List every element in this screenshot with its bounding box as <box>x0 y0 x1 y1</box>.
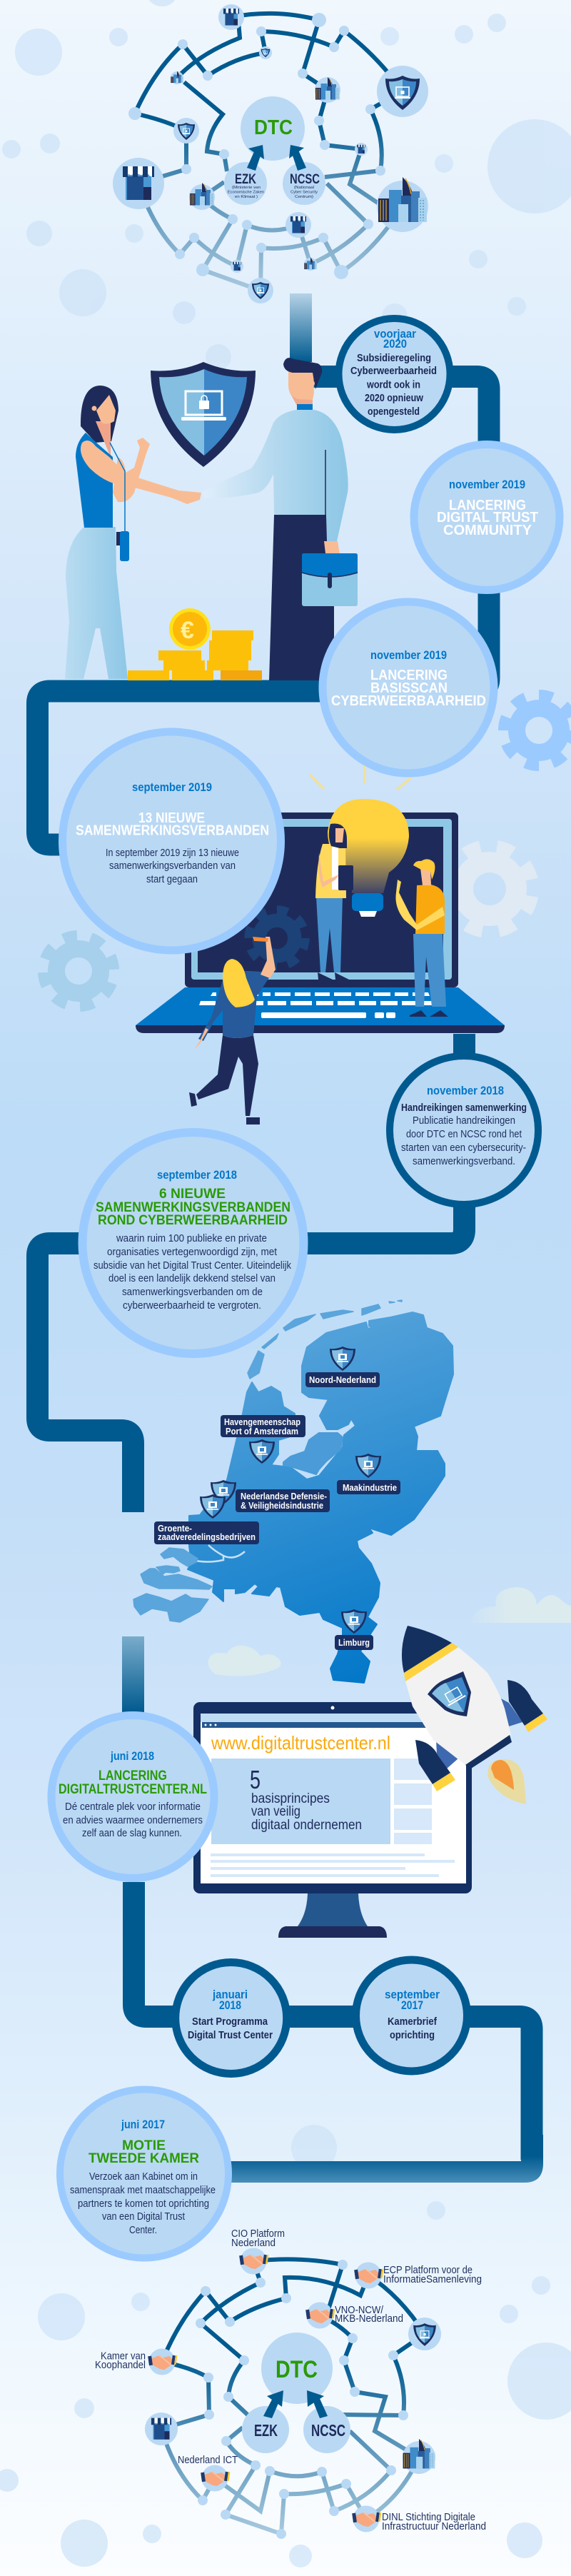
body: organisaties vertegenwoordigd zijn, met <box>107 1246 278 1258</box>
illustration: coins <box>128 608 262 680</box>
label: Kamer van Koophandel: Kamer van <box>101 2350 146 2362</box>
label: Defensie: & Veiligheidsindustrie <box>241 1500 323 1511</box>
rocket <box>402 1626 547 1804</box>
body: oprichting <box>390 2030 435 2041</box>
label: Kamer van Koophandel: Koophandel <box>95 2359 146 2371</box>
label: Groente <box>154 1494 259 1544</box>
date: 2020 <box>383 338 407 351</box>
body: Cyberweerbaarheid <box>350 366 437 377</box>
rocket body <box>405 1647 511 1765</box>
title <box>96 1187 290 1228</box>
DTC circle <box>261 2333 333 2404</box>
panel: september 2017 <box>355 1960 467 2071</box>
label: DINL <box>382 2511 486 2532</box>
label: Kamer van Koophandel <box>95 2350 146 2371</box>
body: starten van een cybersecurity- <box>401 1142 526 1154</box>
title: LANCERING <box>370 668 448 683</box>
body: start gegaan <box>146 873 198 885</box>
body: van een Digital Trust <box>102 2210 186 2223</box>
panel: voorjaar 2020 <box>338 318 450 430</box>
label: ECP <box>383 2264 482 2285</box>
EZK circle: EZK <box>235 172 256 187</box>
gear left <box>36 928 121 1014</box>
arrow: EZK to DTC <box>247 145 264 171</box>
label: VNO-NCW: VNO-NCW/ <box>335 2304 384 2316</box>
network links <box>161 2259 425 2534</box>
illustration: man with briefcase <box>202 358 358 680</box>
label: VNO-NCW <box>335 2304 403 2325</box>
rocket shield <box>428 1671 471 1716</box>
waterways <box>193 1545 245 1562</box>
icon: city <box>403 2439 435 2468</box>
label: Maakindustrie: Maakindustrie <box>343 1482 397 1493</box>
title: DIGITAL TRUST <box>437 510 538 525</box>
NCSC circle <box>283 162 325 205</box>
DTC circle <box>241 96 305 161</box>
arrow: NCSC to DTC <box>289 145 306 171</box>
body <box>106 847 239 885</box>
cloud right <box>472 1587 571 1623</box>
body: Publicatie handreikingen <box>413 1115 515 1127</box>
date: juni 2017 <box>121 2118 165 2131</box>
illustration: woman with tablet <box>315 823 353 980</box>
pipe stub top <box>290 293 312 362</box>
body: Subsidieregeling <box>357 353 431 364</box>
title: TWEEDE KAMER <box>89 2151 199 2166</box>
date: 2017 <box>401 1999 423 2012</box>
icon: large shield <box>385 76 420 110</box>
flame <box>487 1759 526 1804</box>
body: Digital Trust Center <box>188 2030 273 2041</box>
title: LANCERING <box>98 1769 167 1783</box>
panel: september 2019 <box>63 732 281 950</box>
label: Nederland ICT: Nederland ICT <box>178 2454 238 2466</box>
label: DINL: DINL Stichting Digitale <box>382 2511 475 2523</box>
body: subsidie van het Digital Trust Center. Uiteindelijk <box>94 1259 291 1272</box>
label: Havengemeenschap: Havengemeenschap <box>224 1417 300 1427</box>
label: Havengemeenschap: Port of Amsterdam <box>226 1426 298 1437</box>
body: zelf aan de slag kunnen. <box>82 1827 182 1839</box>
title: CYBERWEERBAARHEID <box>331 693 486 709</box>
title: SAMENWERKINGSVERBANDEN <box>76 822 269 838</box>
screen heading: van veilig <box>251 1804 300 1819</box>
title: ROND CYBERWEERBAARHEID <box>98 1213 288 1228</box>
title: 6 NIEUWE <box>159 1187 226 1202</box>
body: samenwerkingsverband. <box>413 1155 515 1167</box>
body: cyberweerbaarheid te vergroten. <box>123 1299 261 1312</box>
icons: handshakes <box>148 2255 383 2527</box>
body <box>188 2016 273 2041</box>
EZK circle: (Ministerie van <box>232 186 261 190</box>
title: Handreikingen samenwerking <box>401 1102 527 1114</box>
icon: large store <box>123 166 154 200</box>
timeline pipes <box>37 377 532 2160</box>
illustration: coins: € <box>181 617 194 644</box>
body: opengesteld <box>368 406 420 418</box>
date <box>385 1988 440 2012</box>
body: doel is een landelijk dekkend stelsel van <box>108 1272 276 1284</box>
title: COMMUNITY <box>443 523 532 538</box>
screen heading: 5 <box>250 1765 261 1794</box>
date <box>374 328 417 351</box>
left fin <box>415 1740 450 1784</box>
arrow: NCSC to DTC <box>307 2390 328 2418</box>
illustration: woman shaking hands <box>65 386 201 679</box>
gear dark on laptop <box>250 911 304 965</box>
illustration: light bulb <box>328 799 409 917</box>
label: DINL: Infrastructuur Nederland <box>382 2520 486 2532</box>
body: samenspraak met maatschappelijke <box>70 2184 216 2196</box>
body <box>70 2170 216 2236</box>
label: Noord-Nederland: Noord-Nederland <box>309 1374 376 1385</box>
label: Limburg: Limburg <box>338 1637 370 1648</box>
label: VNO-NCW: MKB-Nederland <box>335 2313 403 2325</box>
icons: medium and small <box>171 9 365 299</box>
body: Verzoek aan Kabinet om in <box>89 2170 198 2183</box>
title: BASISSCAN <box>370 680 448 696</box>
body <box>63 1801 203 1839</box>
body: Start Programma <box>192 2016 268 2028</box>
EZK circle: en Klimaat ) <box>235 195 258 199</box>
label: ECP: ECP Platform voor de <box>383 2264 473 2276</box>
islands <box>133 1300 402 1622</box>
background dots top <box>2 0 571 370</box>
EZK circle <box>242 2406 289 2453</box>
title: MOTIE <box>122 2138 166 2153</box>
title: LANCERING <box>449 498 526 513</box>
date: 2018 <box>219 1999 241 2012</box>
label: Maakindustrie <box>337 1454 400 1494</box>
monitor <box>193 1702 472 1938</box>
date: september 2018 <box>157 1169 237 1182</box>
rocket nose <box>402 1626 452 1673</box>
illustration: girl drawing <box>189 937 276 1125</box>
panel: september 2018 <box>83 1132 304 1354</box>
bulb rays <box>310 766 411 790</box>
NCSC circle: (Nationaal <box>294 186 314 190</box>
title <box>331 668 486 709</box>
EZK circle: EZK <box>254 2421 278 2440</box>
date: voorjaar <box>374 328 417 341</box>
date: september 2019 <box>132 781 212 794</box>
body <box>350 353 437 418</box>
icon: large city <box>378 177 427 222</box>
body <box>401 1115 526 1167</box>
label: Noord-Nederland <box>305 1347 380 1387</box>
arrow: EZK to DTC <box>263 2390 283 2418</box>
body: wordt ook in <box>366 380 420 391</box>
date: november 2019 <box>449 478 525 491</box>
title: 13 NIEUWE <box>138 810 205 826</box>
panel: juni 2017 <box>60 2089 228 2258</box>
body: samenwerkingsverbanden van <box>109 860 236 872</box>
NCSC circle: NCSC <box>290 172 320 187</box>
label: Groente: Groente- <box>158 1523 192 1534</box>
map of the Netherlands <box>133 1300 453 1683</box>
label: Havengemeenschap <box>221 1415 305 1464</box>
label: CIO Platform: Nederland <box>231 2237 276 2249</box>
network nodes <box>145 2248 441 2539</box>
rocket base band <box>465 1735 512 1769</box>
title <box>437 498 538 538</box>
label: Defensie: Nederlandse Defensie- <box>241 1491 327 1501</box>
EZK circle <box>224 162 267 205</box>
panel: november 2019 community <box>414 444 560 590</box>
fin connectors <box>436 1698 522 1769</box>
NCSC circle: Cyber Security <box>290 190 318 194</box>
body <box>94 1232 291 1312</box>
gear top right <box>505 697 571 764</box>
body: Kamerbrief <box>388 2016 437 2028</box>
body: 2020 opnieuw <box>365 393 424 404</box>
screen heading <box>250 1765 362 1833</box>
network links <box>135 14 403 291</box>
date <box>212 1988 248 2012</box>
pipe end with fade <box>228 2135 543 2183</box>
body: en advies waarmee ondernemers <box>63 1814 203 1826</box>
body: Center. <box>129 2224 157 2236</box>
label: Groente: zaadveredelingsbedrijven <box>158 1531 256 1542</box>
DTC circle: DTC <box>254 116 293 139</box>
illustration: man in orange sweater <box>395 859 448 1017</box>
gear right <box>443 842 537 936</box>
body <box>388 2016 437 2041</box>
Flevoland <box>283 1433 343 1474</box>
title <box>59 1769 207 1797</box>
body: door DTC en NCSC rond het <box>406 1128 522 1140</box>
date: januari <box>212 1988 248 2001</box>
DTC circle: DTC <box>276 2356 318 2383</box>
body: samenwerkingsverbanden om de <box>122 1286 263 1298</box>
title <box>76 810 269 838</box>
network nodes <box>113 4 428 303</box>
date: september <box>385 1988 440 2001</box>
illustration: shield <box>151 362 256 467</box>
mainland <box>188 1312 453 1683</box>
body: waarin ruim 100 publieke en private <box>116 1232 267 1244</box>
illustration: laptop <box>136 812 505 1033</box>
body: In september 2019 zijn 13 nieuwe <box>106 847 239 859</box>
icon: shield <box>413 2323 436 2346</box>
panel: november 2019 basisscan <box>323 602 494 773</box>
cloud left <box>208 1646 281 1676</box>
title: DIGITALTRUSTCENTER.NL <box>59 1782 207 1797</box>
panel: november 2018 <box>390 1056 538 1204</box>
background dots bottom <box>0 2125 571 2567</box>
network diagram top <box>113 4 428 303</box>
label: CIO Platform <box>231 2228 285 2249</box>
NCSC circle: NCSC <box>311 2421 345 2440</box>
panel: januari 2018 <box>176 1962 287 2073</box>
screen heading: basisprincipes <box>251 1791 330 1806</box>
pipe stub map <box>122 1636 144 1712</box>
date: november 2019 <box>370 649 447 662</box>
NCSC circle <box>303 2406 350 2453</box>
right fin <box>507 1680 543 1726</box>
NCSC circle: Centrum) <box>295 195 313 199</box>
body: Dé centrale plek voor informatie <box>65 1801 201 1813</box>
label: CIO Platform: CIO Platform <box>231 2228 285 2240</box>
date: november 2018 <box>427 1085 504 1097</box>
body: partners te komen tot oprichting <box>78 2198 209 2210</box>
label: Limburg <box>335 1609 373 1650</box>
url: www.digitaltrustcenter.nl <box>211 1732 390 1754</box>
network diagram bottom <box>95 2228 486 2539</box>
title: SAMENWERKINGSVERBANDEN <box>96 1200 290 1215</box>
EZK circle: Economische Zaken <box>228 190 264 194</box>
date: juni 2018 <box>110 1750 154 1763</box>
label: ECP: InformatieSamenleving <box>383 2273 482 2285</box>
title <box>89 2138 199 2166</box>
icon: store <box>151 2418 171 2440</box>
panel: juni 2018 <box>51 1715 214 1878</box>
label: Defensie <box>211 1480 330 1512</box>
screen heading: digitaal ondernemen <box>251 1818 362 1833</box>
